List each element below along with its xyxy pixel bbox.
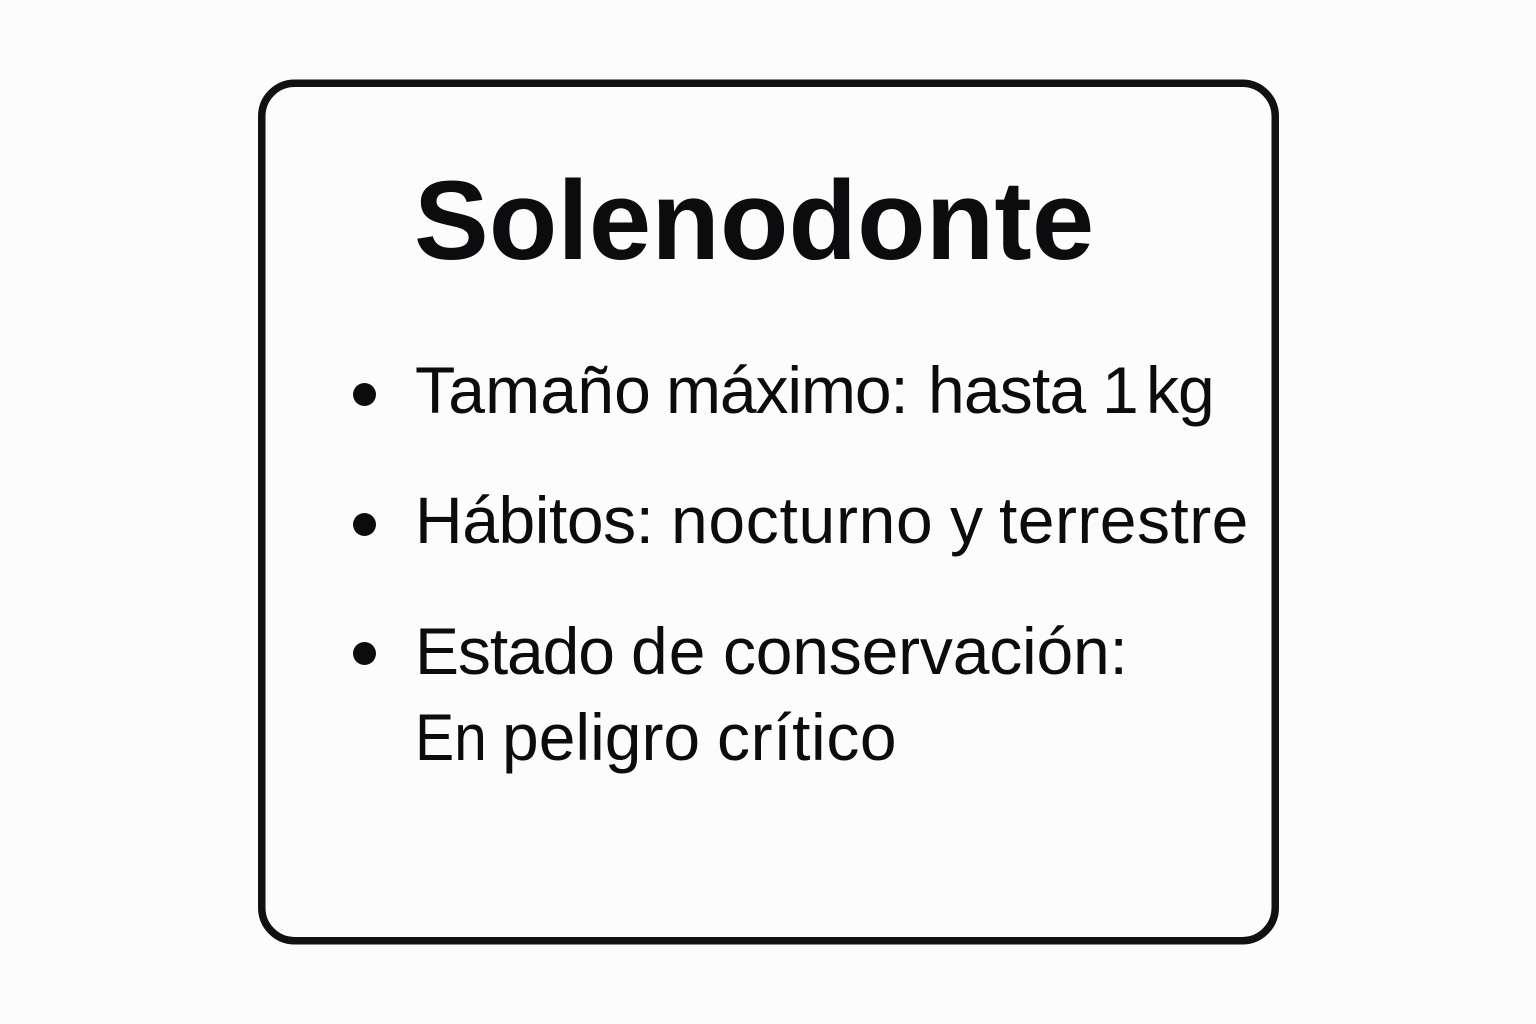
bullet: size marker xyxy=(353,383,376,406)
text: conservation status value: En xyxy=(415,700,487,774)
bullet: habits marker xyxy=(353,513,376,536)
text: habits: nocturno xyxy=(671,483,933,557)
text: conservation status: conservación: xyxy=(723,614,1128,688)
text: maximum size: 1 xyxy=(1102,353,1139,427)
text: habits: terrestre xyxy=(999,483,1249,557)
text: maximum size: hasta xyxy=(928,353,1085,427)
text: maximum size: kg xyxy=(1146,353,1214,427)
text: habits xyxy=(415,483,1249,557)
text: habits: y xyxy=(950,483,983,557)
text: conservation status value: peligro xyxy=(502,700,700,774)
text: maximum size: Tamaño xyxy=(415,353,651,427)
text: maximum size: máximo: xyxy=(666,353,908,427)
text: habits: Hábitos: xyxy=(415,483,654,557)
text: maximum size xyxy=(415,353,1214,427)
text: conservation status value: crítico xyxy=(717,700,897,774)
text: conservation status: Estado xyxy=(415,614,614,688)
bullet: conservation marker xyxy=(353,642,376,665)
title: Solenodonte xyxy=(414,158,1094,283)
panel: info card xyxy=(258,80,1279,944)
text: conservation status xyxy=(415,614,1128,688)
text: conservation status: de xyxy=(631,614,706,688)
text: conservation status value xyxy=(415,700,897,774)
